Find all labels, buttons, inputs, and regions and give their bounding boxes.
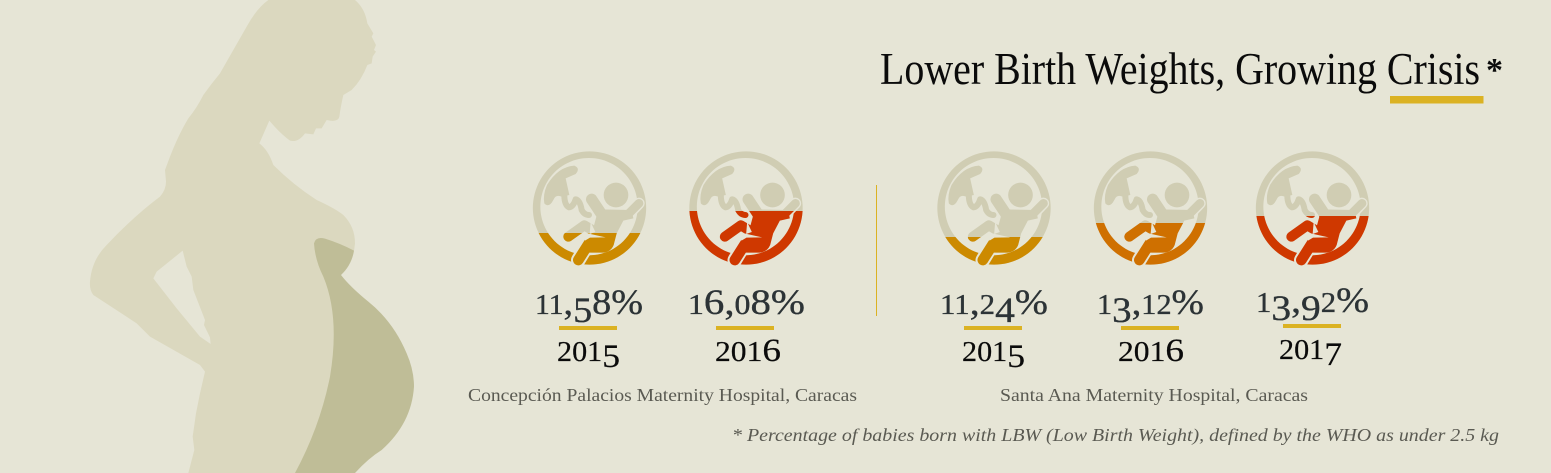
title: * [1486, 52, 1503, 89]
value 13,92%: 1 [1256, 288, 1271, 319]
icon: baby 2015 Santa Ana, 11,24% [937, 151, 1051, 265]
value 13,92%: , [1291, 280, 1301, 320]
value 11,58%: 8% [592, 282, 643, 322]
value 13,12%: 1 [1097, 290, 1112, 321]
icon: baby 2016 Concepción Palacios, 16,08% [689, 151, 803, 265]
silhouette: pregnant woman [90, 0, 414, 473]
icon: baby 2017 Santa Ana, 13,92% [1256, 151, 1369, 265]
value 13,12%: 3 [1112, 290, 1132, 330]
year 2015: 201 [962, 337, 1007, 368]
value underlines [559, 324, 1341, 330]
value 11,24%: 4 [995, 290, 1015, 330]
year 2016: 2016 [1118, 333, 1184, 369]
value 11,58%: 5 [573, 290, 592, 330]
year 2017: 201 [1279, 335, 1324, 366]
value 13,92%: 9 [1301, 288, 1321, 328]
year 2015: 5 [602, 339, 620, 375]
year 2016: 2016 [715, 333, 781, 369]
value 16,08%: 16,08% [688, 282, 805, 322]
year 2017: 7 [1324, 337, 1342, 373]
title underline [1390, 96, 1484, 104]
year 2015: 5 [1007, 339, 1025, 375]
year 2015: 201 [557, 337, 602, 368]
label: Santa Ana hospital: Santa Ana Maternity Hospital, Caracas [1000, 385, 1308, 405]
value 13,92%: % [1336, 280, 1366, 320]
divider between hospitals [876, 185, 877, 316]
value 13,92%: 3 [1271, 288, 1291, 328]
value 11,24%: 11,2 [940, 282, 994, 322]
value 11,24%: % [1015, 282, 1048, 322]
icon: baby 2016 Santa Ana, 13,12% [1094, 151, 1207, 265]
value 13,12%: , [1132, 282, 1141, 322]
label: Concepción Palacios hospital: Concepción Palacios Maternity Hospital, Caracas [468, 385, 857, 405]
silhouette: belly [295, 238, 414, 473]
title: Lower Birth Weights, Growing Crisis [880, 44, 1480, 94]
value 13,92%: 2 [1321, 288, 1336, 319]
footnote: * Percentage of babies born with LBW (Low Birth Weight), defined by the WHO as under 2.5 kg [732, 425, 1499, 446]
icon: baby 2015 Concepción Palacios, 11,58% [533, 151, 646, 265]
value 13,12%: 12% [1141, 282, 1202, 322]
value 11,58%: 11, [535, 282, 573, 322]
